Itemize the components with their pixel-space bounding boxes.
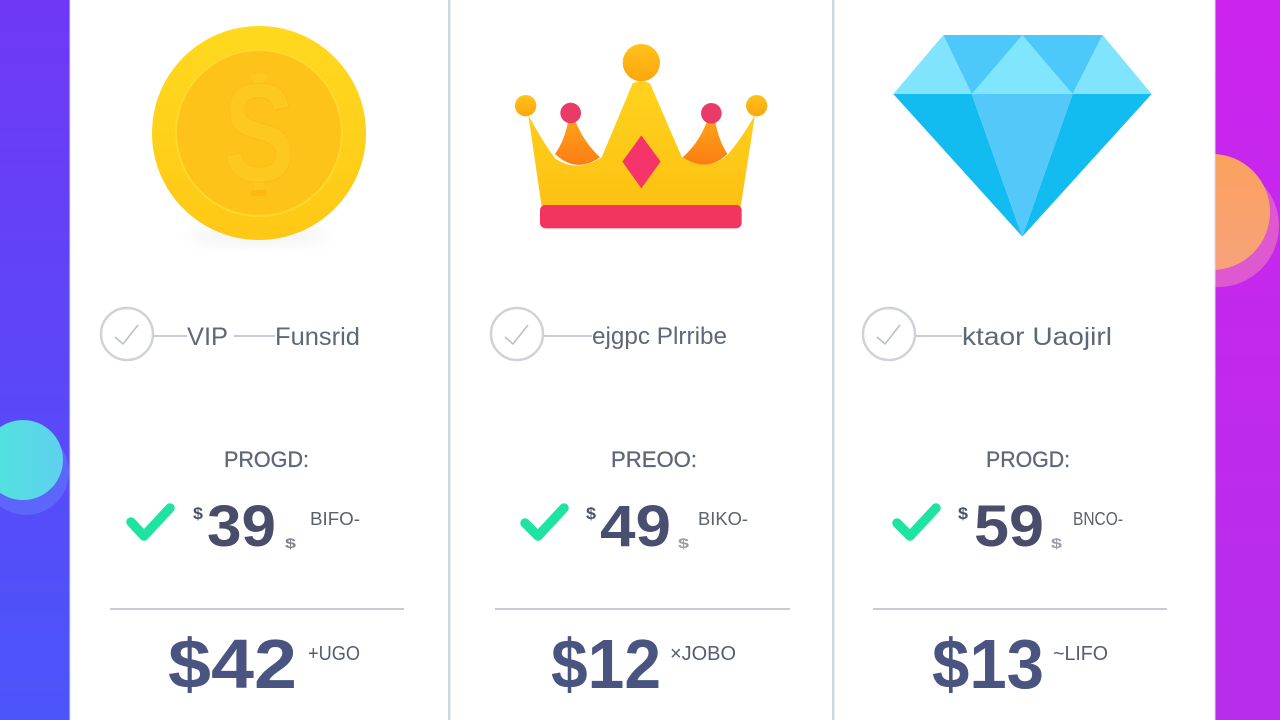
- icon: green check: [525, 508, 564, 536]
- feature label: premium: ejgpc Plrribe: [592, 323, 727, 350]
- right background panel: [1213, 0, 1280, 720]
- monthly price: BNCO-: [1073, 509, 1123, 529]
- icon: crown: [515, 44, 767, 228]
- feature label: third plan: ktaor Uaojirl: [962, 323, 1112, 351]
- feature label: VIP: VIP: [187, 323, 228, 351]
- panel: VIP plan: [101, 26, 404, 703]
- price label: PROGD:: [986, 447, 1070, 472]
- monthly price: $: [958, 504, 969, 523]
- total price: [932, 625, 1108, 703]
- total price: $42: [168, 625, 297, 703]
- total price: ~LIFO: [1053, 643, 1108, 665]
- monthly price: $: [1051, 535, 1062, 551]
- icon: diamond: [893, 35, 1152, 237]
- monthly price: 39: [207, 494, 276, 559]
- monthly price: [958, 494, 1123, 559]
- total price: $12: [551, 625, 661, 703]
- divider: [110, 608, 404, 610]
- decorative teal circle: [0, 420, 69, 515]
- divider: [873, 608, 1167, 610]
- monthly price: [193, 494, 360, 559]
- monthly price: [586, 494, 748, 559]
- icon: gold coin: S: [223, 54, 295, 211]
- price label: PREOO:: [611, 447, 697, 472]
- monthly price: BIFO-: [310, 509, 360, 529]
- icon: green check: [897, 508, 936, 536]
- monthly price: $: [193, 504, 204, 523]
- icon: gold coin: [152, 26, 366, 244]
- total price: [168, 625, 360, 703]
- panel: premium plan: [491, 44, 790, 703]
- total price: [551, 625, 736, 703]
- monthly price: BIKO-: [698, 509, 748, 529]
- monthly price: $: [586, 504, 597, 523]
- monthly price: 49: [600, 494, 671, 559]
- feature label: premium: [491, 308, 727, 360]
- feature label: VIP: [101, 308, 360, 360]
- panel: diamond plan: [863, 35, 1167, 703]
- feature label: VIP: Funsrid: [275, 323, 360, 351]
- price label: PROGD:: [224, 447, 309, 472]
- feature label: third plan: [863, 308, 1112, 360]
- total price: +UGO: [308, 643, 360, 665]
- icon: green check: [131, 508, 170, 536]
- divider: [495, 608, 790, 610]
- left background panel: [0, 0, 72, 720]
- total price: ×JOBO: [670, 643, 736, 665]
- monthly price: $: [285, 535, 296, 551]
- total price: $13: [932, 625, 1044, 703]
- monthly price: $: [678, 535, 689, 551]
- monthly price: 59: [974, 494, 1044, 559]
- decorative peach circle: [1154, 154, 1279, 287]
